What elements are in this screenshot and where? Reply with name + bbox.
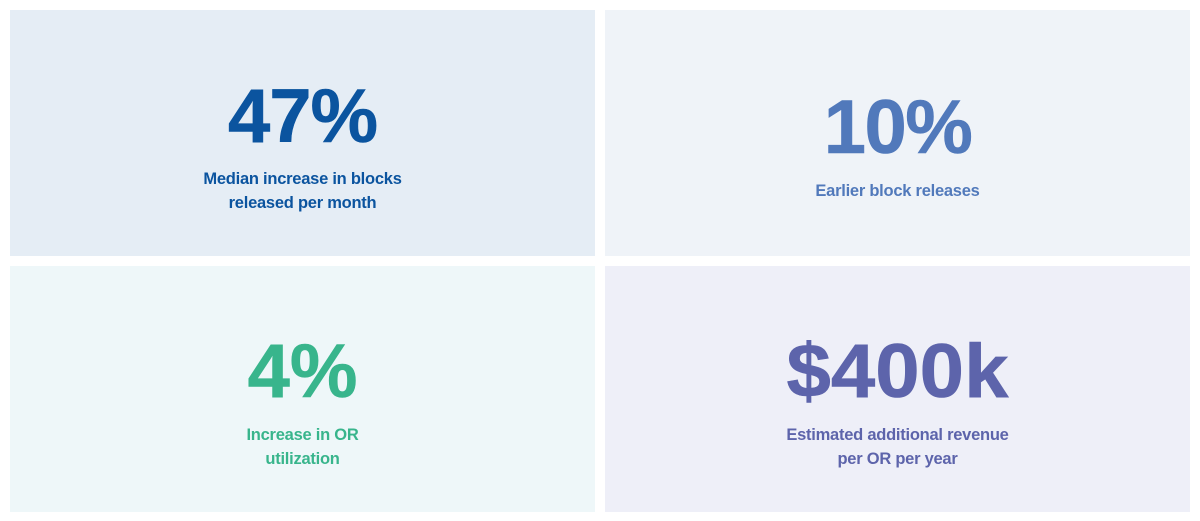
stat: 10%: 10% [824,85,971,170]
stat: $400k: $400k [787,329,1008,414]
label: estimated additional revenue [786,426,1009,468]
panel: 47% median increase [10,10,595,256]
stat: 47%: 47% [228,74,377,159]
label: increase in OR utilization: Increase in OR [246,426,359,444]
label: estimated additional revenue: per OR per year [837,450,958,468]
panel: 10% earlier releases [605,10,1190,256]
label: median increase: Median increase in blocks [203,170,402,188]
label: increase in OR utilization: utilization [265,450,340,468]
label: median increase [203,170,402,212]
stat: 4%: 4% [248,329,357,414]
label: earlier block releases: Earlier block releases [815,182,980,200]
panel: $400k revenue [605,266,1190,512]
label: estimated additional revenue: Estimated additional revenue [786,426,1009,444]
label: median increase: released per month [229,194,376,212]
panel: 4% OR utilization [10,266,595,512]
label: increase in OR utilization [246,426,359,468]
